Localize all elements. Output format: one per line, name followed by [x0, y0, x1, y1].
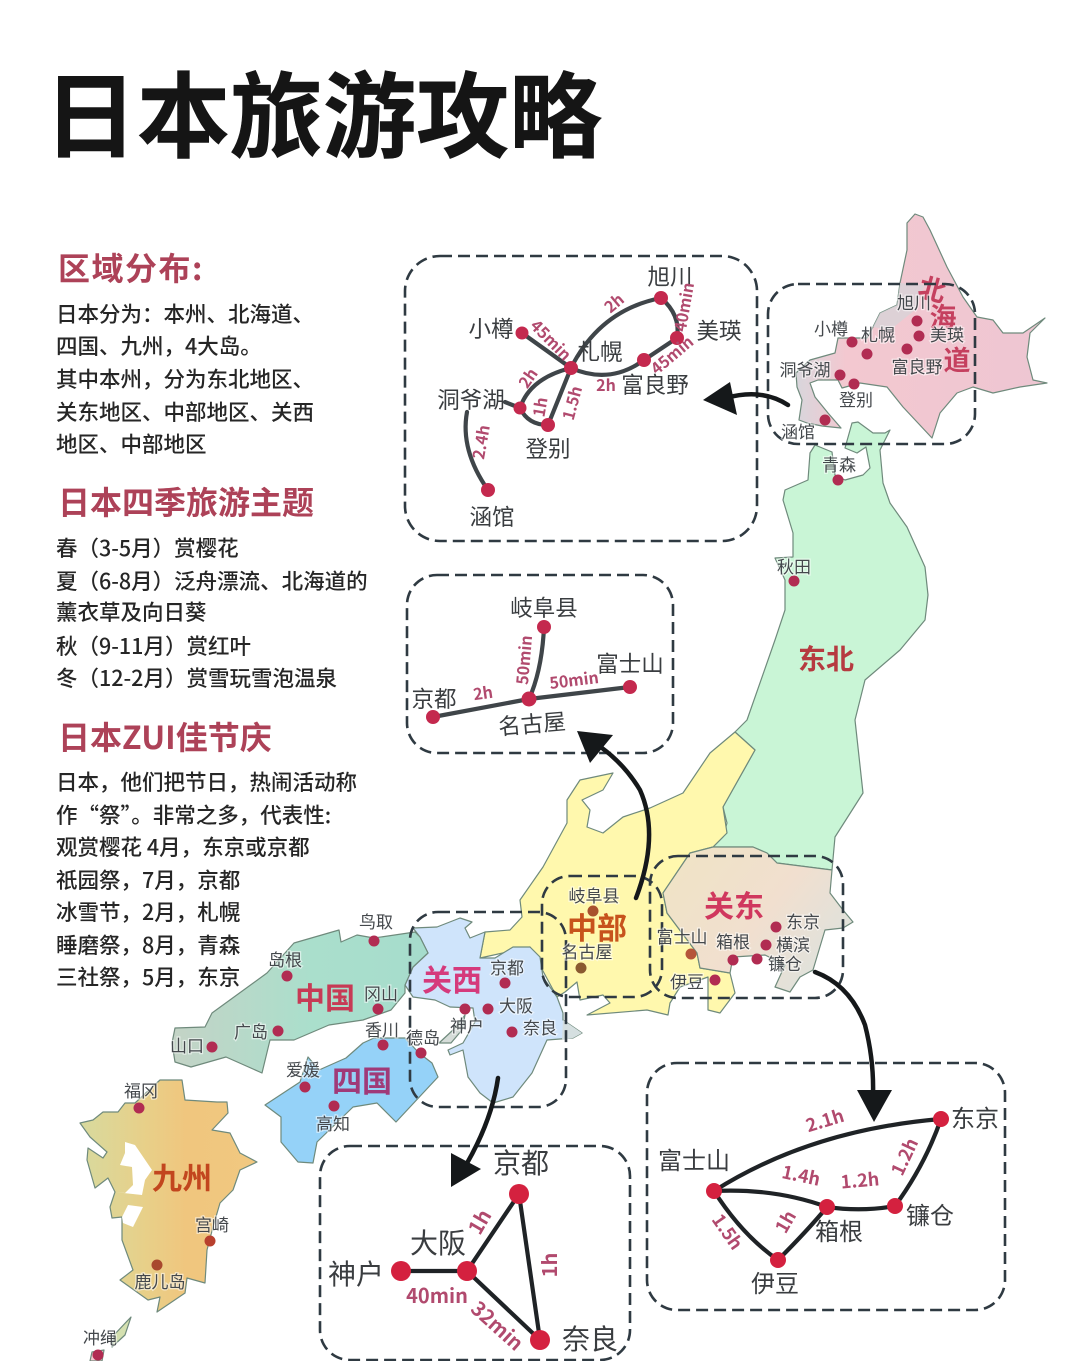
- region label: Hokkaido: 海: [930, 296, 956, 335]
- route nodes: [426, 620, 637, 724]
- panel: Kanto routes: [647, 1063, 1005, 1310]
- travel times: 40min: [667, 280, 699, 333]
- city names: 奈良: [562, 1318, 618, 1358]
- festivals body text: [56, 766, 357, 992]
- map cities: Kansai: 神户: [450, 1012, 484, 1037]
- festivals body text: 作“祭”。非常之多，代表性:: [56, 799, 331, 830]
- map cities: Hokkaido: 美瑛: [930, 321, 964, 346]
- city names: 镰仓: [906, 1196, 954, 1231]
- map cities: Kyushu and Okinawa: 冲绳: [83, 1324, 117, 1349]
- region label: Kanto: 关东: [704, 882, 764, 926]
- travel times: 2h: [598, 287, 629, 318]
- route lines: [433, 627, 630, 717]
- city names: 旭川: [647, 260, 693, 292]
- map cities: Kyushu and Okinawa: 福冈: [124, 1077, 158, 1102]
- map cities: Hokkaido: 旭川: [897, 289, 931, 314]
- title: 日本旅游攻略: [44, 42, 602, 177]
- travel times: 50min: [548, 664, 600, 694]
- festivals body text: 日本，他们把节日，热闹活动称: [56, 766, 357, 797]
- map cities: Kansai: 京都: [490, 954, 524, 979]
- map cities: Kansai: 奈良: [523, 1014, 557, 1039]
- region: Kyushu: [80, 1080, 257, 1312]
- map cities: Kansai: 大阪: [499, 992, 533, 1017]
- map cities: Shikoku: 爱媛: [286, 1056, 320, 1081]
- map cities: Shikoku: 德岛: [406, 1024, 440, 1049]
- regions body text: 关东地区、中部地区、关西: [56, 396, 314, 427]
- travel times: [471, 634, 600, 705]
- map cities: Chubu: [562, 882, 620, 974]
- travel times: 45min: [526, 313, 578, 365]
- region: Shikoku: [265, 1038, 438, 1163]
- city names: 美瑛: [696, 314, 742, 346]
- map cities: Hokkaido: 洞爷湖: [780, 356, 830, 381]
- map cities: Hokkaido: 小樽: [814, 315, 848, 340]
- regions body text: 地区、中部地区: [56, 428, 207, 459]
- travel times: [406, 1203, 563, 1356]
- map cities: Hokkaido: [780, 289, 964, 443]
- Kyushu inland seas: [115, 1142, 152, 1227]
- travel times: 1.5h: [706, 1208, 750, 1255]
- map dashed box: Chubu: [542, 876, 662, 997]
- map cities: Chugoku: 岛根: [268, 946, 302, 971]
- travel times: 2h: [471, 679, 494, 705]
- map cities: Chugoku: [170, 908, 398, 1057]
- map cities: Shikoku: 高知: [316, 1110, 350, 1135]
- regions body text: [56, 298, 314, 459]
- festivals body text: 祇园祭，7月，京都: [56, 864, 240, 895]
- festivals body text: 观赏樱花 4月，东京或京都: [56, 831, 310, 862]
- travel times: 2h: [512, 362, 543, 392]
- city names: 富士山: [596, 647, 664, 679]
- text block: four seasons: [56, 478, 368, 693]
- travel times: 1.4h: [780, 1158, 823, 1192]
- map cities: Kanto: 富士山: [656, 923, 708, 948]
- region: Tohoku: [713, 422, 928, 870]
- map cities: Kanto: [656, 908, 820, 993]
- map of Japan: [80, 214, 1047, 1361]
- region label: Hokkaido: [915, 265, 970, 378]
- map cities: Kansai: [450, 954, 557, 1039]
- city names: 京都: [411, 682, 457, 714]
- Kansai east tip shading: [562, 1020, 582, 1040]
- travel times: 40min: [406, 1280, 468, 1309]
- region: Hokkaido: [796, 214, 1047, 438]
- text block: festivals: [56, 713, 357, 992]
- travel times: 1.2h: [840, 1165, 880, 1195]
- map cities: Chugoku: 山口: [170, 1032, 204, 1057]
- route nodes: [391, 1184, 550, 1350]
- arrow: Kanto to routes: [815, 972, 892, 1122]
- travel times: 2.4h: [465, 423, 495, 461]
- seasons body text: 春（3-5月）赏樱花: [56, 532, 239, 563]
- region: Okinawa: [112, 1317, 131, 1347]
- travel times: 1h: [534, 1253, 563, 1277]
- panel: Hokkaido routes: [405, 256, 757, 541]
- travel times: 1.5h: [555, 383, 587, 422]
- route lines: [714, 1119, 941, 1260]
- festivals body text: 冰雪节，2月，札幌: [56, 896, 240, 927]
- seasons body text: 薰衣草及向日葵: [56, 596, 207, 627]
- arrow: Kansai to routes: [451, 1078, 498, 1187]
- regions body text: 其中本州，分为东北地区、: [56, 363, 314, 394]
- map cities: Kanto: 东京: [786, 908, 820, 933]
- city names: 岐阜县: [510, 591, 578, 623]
- travel times: 45min: [645, 329, 698, 379]
- map dashed box: Hokkaido: [768, 284, 975, 444]
- arrow: Hokkaido to routes: [703, 382, 788, 415]
- city names: [328, 1142, 618, 1358]
- route lines: [401, 1194, 540, 1340]
- map dashed box: Kansai: [410, 912, 566, 1107]
- map cities: Shikoku: 香川: [365, 1016, 399, 1041]
- city names: [437, 260, 742, 532]
- heading: regions: 区域分布:: [58, 244, 204, 290]
- city names: 神户: [328, 1253, 384, 1293]
- map cities: Tohoku: 青森: [822, 451, 856, 476]
- map cities: Tohoku: 秋田: [777, 553, 811, 578]
- travel times: 1h: [460, 1203, 497, 1239]
- Hokkaido grey inland shading: [873, 283, 925, 330]
- region label: Kansai: 关西: [422, 956, 482, 1000]
- region: Chugoku: [172, 930, 428, 1073]
- region label: Kyushu: 九州: [152, 1154, 212, 1198]
- travel times: 1h: [768, 1205, 802, 1238]
- city names: 京都: [493, 1142, 549, 1182]
- festivals body text: 睡磨祭，8月，青森: [56, 929, 241, 960]
- city names: 富士山: [658, 1141, 730, 1176]
- seasons body text: 秋（9-11月）赏红叶: [56, 630, 251, 661]
- map cities: Chugoku: 广岛: [234, 1018, 268, 1043]
- city names: 富良野: [621, 368, 689, 400]
- region label: Hokkaido: 北: [915, 265, 951, 310]
- regions body text: 日本分为：本州、北海道、: [56, 298, 314, 329]
- Okinawa south island: [90, 1350, 104, 1361]
- map cities: Kyushu and Okinawa: 鹿儿岛: [134, 1268, 186, 1293]
- route nodes: [481, 291, 684, 497]
- travel times: 50min: [509, 634, 537, 686]
- map cities: Hokkaido: 富良野: [892, 353, 942, 378]
- map cities: Kanto: 横滨: [776, 931, 810, 956]
- panel: Kansai routes: [320, 1142, 630, 1360]
- city names: 东京: [951, 1099, 999, 1134]
- panel: Chubu routes: [407, 575, 673, 753]
- map dashed box: Kanto: [650, 856, 843, 998]
- seasons body text: 冬（12-2月）赏雪玩雪泡温泉: [56, 662, 337, 693]
- travel times: [706, 1102, 924, 1255]
- text block: regional distribution: [56, 244, 314, 459]
- map cities: Chubu: 岐阜县: [568, 882, 620, 907]
- travel times: 1h: [525, 395, 553, 419]
- region: Chubu: [480, 732, 755, 1015]
- region label: Tohoku: 东北: [798, 638, 854, 678]
- region label: Shikoku: 四国: [332, 1057, 392, 1101]
- city names: 名古屋: [497, 704, 567, 742]
- map cities: Hokkaido: 札幌: [861, 321, 895, 346]
- travel times: [465, 280, 699, 461]
- city names: 登别: [525, 432, 571, 464]
- seasons body text: 夏（6-8月）泛舟漂流、北海道的: [56, 565, 368, 596]
- map cities: Hokkaido: 涵馆: [781, 418, 815, 443]
- city names: 伊豆: [751, 1264, 799, 1299]
- Awaji strip: [439, 1015, 465, 1043]
- city names: [658, 1099, 999, 1299]
- map cities: Chugoku: 冈山: [364, 980, 398, 1005]
- map cities: Shikoku: [286, 1016, 440, 1135]
- region label: Chubu: 中部: [567, 904, 627, 948]
- heading: seasons: 日本四季旅游主题: [58, 478, 314, 524]
- map cities: Kanto: 箱根: [716, 928, 750, 953]
- city names: 箱根: [815, 1212, 863, 1247]
- map cities: Kyushu and Okinawa: [83, 1077, 229, 1360]
- city names: 洞爷湖: [437, 383, 505, 415]
- route lines: [466, 298, 678, 490]
- map cities: Tohoku: [777, 451, 856, 586]
- map cities: Kanto: 镰仓: [768, 950, 802, 975]
- seasons body text: [56, 532, 368, 693]
- heading: festivals: 日本ZUI佳节庆: [58, 713, 272, 759]
- route nodes: [706, 1111, 949, 1268]
- region label: Hokkaido: 道: [944, 339, 970, 378]
- arrow: Chubu to routes: [577, 731, 649, 898]
- map cities: Chugoku: 鸟取: [359, 908, 393, 933]
- regions body text: 四国、九州，4大岛。: [56, 330, 262, 361]
- travel times: 2h: [596, 372, 616, 396]
- city names: 涵馆: [469, 500, 515, 532]
- city names: 大阪: [410, 1222, 466, 1262]
- map cities: Kyushu and Okinawa: 宫崎: [195, 1211, 229, 1236]
- map cities: Chubu: 名古屋: [562, 938, 612, 963]
- region: Kansai: [405, 918, 582, 1103]
- travel times: 1.2h: [884, 1134, 924, 1180]
- travel times: 32min: [465, 1293, 531, 1356]
- region: Kanto: [663, 847, 853, 992]
- city names: 札幌: [577, 335, 623, 367]
- festivals body text: 三社祭，5月，东京: [56, 961, 240, 992]
- map cities: Hokkaido: 登别: [839, 386, 873, 411]
- map cities: Kanto: 伊豆: [670, 968, 704, 993]
- travel times: 2.1h: [802, 1102, 847, 1138]
- city names: 小樽: [468, 312, 514, 344]
- city names: [411, 591, 664, 742]
- region label: Chugoku: 中国: [295, 974, 355, 1018]
